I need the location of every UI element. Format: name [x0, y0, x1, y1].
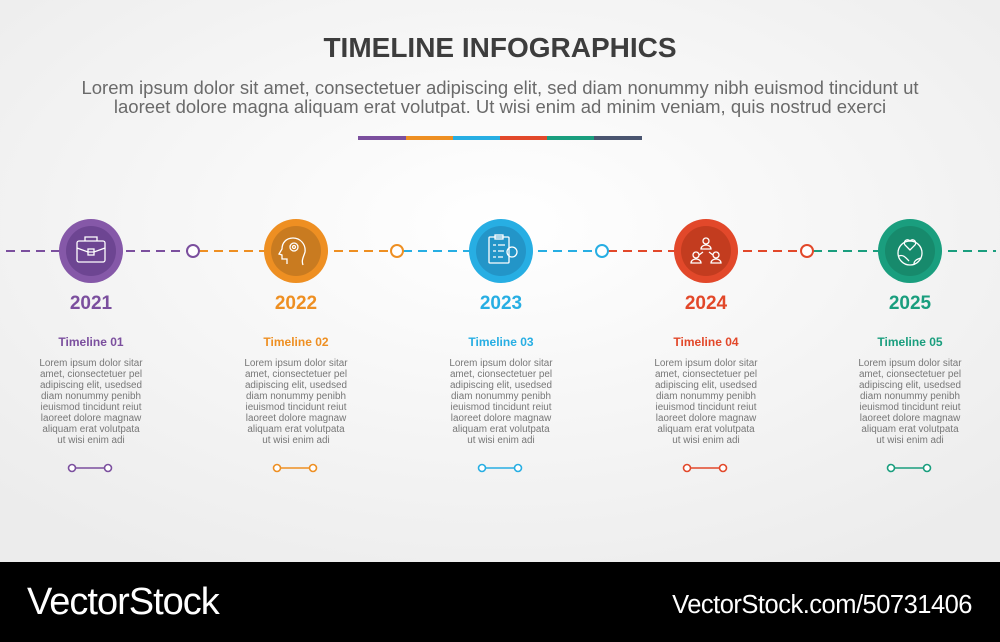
stage 2022: diam nonummy penibh [246, 391, 346, 402]
icon: head gear [279, 238, 305, 265]
stage 2023: adipiscing elit, usedsed [450, 380, 552, 391]
footer: VectorStock.com/50731406 [672, 591, 972, 619]
stage 2021: ieuismod tincidunt reiut [40, 402, 142, 413]
stage 2024: adipiscing elit, usedsed [655, 380, 757, 391]
stage 2023: ut wisi enim adi [467, 435, 535, 446]
stage 2024: ieuismod tincidunt reiut [656, 402, 757, 413]
timeline connectors [6, 250, 996, 252]
stage 2024: amet, cionsectetuer pel [655, 369, 757, 380]
icon: globe heart [898, 240, 922, 265]
stage 2025: 2025 [889, 293, 932, 314]
stage 2022: ieuismod tincidunt reiut [246, 402, 347, 413]
stage 2025: Timeline 05 [877, 335, 943, 349]
stage 2024: aliquam erat volutpata [657, 424, 755, 435]
stage 2025: laoreet dolore magnaw [860, 413, 961, 424]
subtitle [81, 77, 919, 117]
stage 2023 [449, 219, 553, 472]
stage 2021: diam nonummy penibh [41, 391, 141, 402]
stage 2021: ut wisi enim adi [57, 435, 125, 446]
stage 2023: amet, cionsectetuer pel [450, 369, 552, 380]
stage 2021: adipiscing elit, usedsed [40, 380, 142, 391]
stage 2025 [858, 219, 962, 472]
stage 2022: amet, cionsectetuer pel [245, 369, 347, 380]
stage 2025: ieuismod tincidunt reiut [860, 402, 961, 413]
stage 2023: ieuismod tincidunt reiut [450, 402, 552, 413]
stage 2025: ut wisi enim adi [876, 435, 944, 446]
stage 2021: Lorem ipsum dolor sitar [39, 358, 143, 369]
icon: briefcase [77, 237, 105, 262]
stage 2023: aliquam erat volutpata [452, 424, 550, 435]
stage 2023: diam nonummy penibh [451, 391, 551, 402]
stage 2021: Timeline 01 [58, 335, 124, 349]
stage 2024: Lorem ipsum dolor sitar [654, 358, 758, 369]
stage 2022: ut wisi enim adi [262, 435, 330, 446]
stage 2023: Lorem ipsum dolor sitar [449, 358, 553, 369]
stage 2024: 2024 [685, 293, 728, 314]
stage 2021: amet, cionsectetuer pel [40, 369, 142, 380]
connector dots [187, 245, 813, 257]
stage 2022: 2022 [275, 293, 317, 314]
stage 2021: laoreet dolore magnaw [41, 413, 142, 424]
stage 2022: adipiscing elit, usedsed [245, 380, 347, 391]
icon: people network [691, 238, 721, 263]
stage 2025: aliquam erat volutpata [861, 424, 959, 435]
stage 2022: Timeline 02 [263, 335, 329, 349]
stage 2025: Lorem ipsum dolor sitar [858, 358, 962, 369]
icon: clipboard gear [489, 235, 517, 263]
footer [0, 562, 1000, 642]
stage 2022: laoreet dolore magnaw [246, 413, 347, 424]
stage 2025: adipiscing elit, usedsed [859, 380, 961, 391]
stage 2021: aliquam erat volutpata [42, 424, 140, 435]
stage 2024: laoreet dolore magnaw [656, 413, 757, 424]
stage 2025: diam nonummy penibh [860, 391, 960, 402]
stage 2024: ut wisi enim adi [672, 435, 740, 446]
stage 2023: Timeline 03 [468, 335, 534, 349]
stage 2024: diam nonummy penibh [656, 391, 756, 402]
stage 2025: amet, cionsectetuer pel [859, 369, 961, 380]
subtitle: Lorem ipsum dolor sit amet, consectetuer adipiscing elit, sed diam nonummy nibh euismod tincidunt ut [81, 77, 919, 98]
stage 2021: 2021 [70, 293, 113, 314]
stage 2023: 2023 [480, 293, 522, 314]
stage 2022 [244, 219, 348, 472]
stage 2022: aliquam erat volutpata [247, 424, 345, 435]
color bar [358, 136, 642, 140]
subtitle: laoreet dolore magna aliquam erat volutpat. Ut wisi enim ad minim veniam, quis nostrud exerci [114, 96, 886, 117]
title: TIMELINE INFOGRAPHICS [323, 32, 677, 63]
footer: VectorStock [27, 581, 221, 623]
stage 2024: Timeline 04 [673, 335, 739, 349]
stage 2023: laoreet dolore magnaw [451, 413, 552, 424]
stage 2021 [39, 219, 143, 472]
stage 2022: Lorem ipsum dolor sitar [244, 358, 348, 369]
stage 2024 [654, 219, 758, 472]
